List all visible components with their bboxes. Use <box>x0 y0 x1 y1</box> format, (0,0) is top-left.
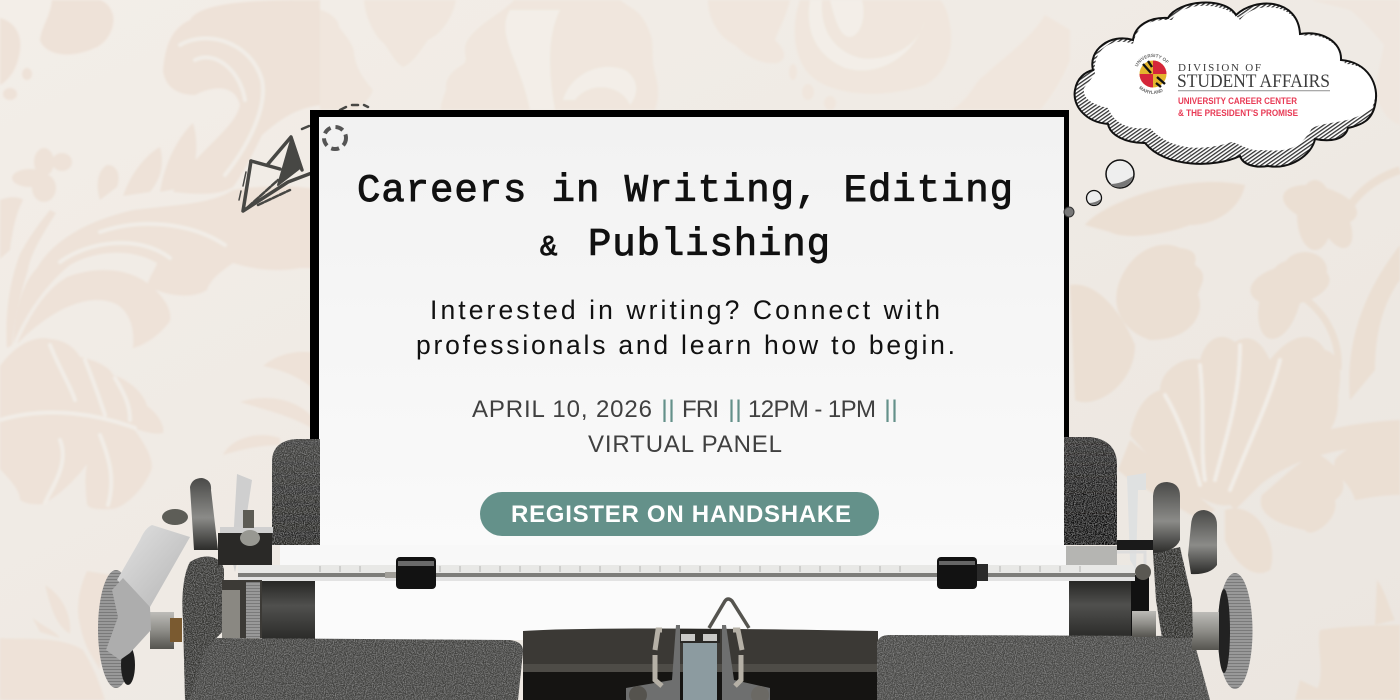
left paper-guard block <box>272 439 320 545</box>
register button <box>480 492 879 536</box>
slim lever <box>232 474 252 572</box>
event details: || <box>661 396 675 423</box>
paper below guard <box>280 545 1066 567</box>
career center wordmark: & THE PRESIDENT'S PROMISE <box>1178 108 1298 119</box>
left knob <box>98 570 135 688</box>
right keyboard cover <box>877 635 1210 700</box>
top centre foliage <box>320 0 1400 125</box>
title: Careers in Writing, Editing <box>357 169 1013 213</box>
event details: || <box>884 396 898 423</box>
title: Publishing <box>588 223 830 267</box>
division wordmark: DIVISION OF <box>1178 62 1261 74</box>
right slim tab <box>1127 473 1146 570</box>
right paper-guard block <box>1064 437 1117 545</box>
left dark disc <box>182 556 224 700</box>
paper below rod <box>315 576 1069 640</box>
right knob <box>1218 573 1252 689</box>
paper sheet with black frame <box>310 110 1069 557</box>
university seal: UNIVERSITY OF <box>1134 54 1169 66</box>
event details: FRI <box>682 396 719 423</box>
typewriter <box>98 437 1252 700</box>
right mechanism <box>1117 473 1252 689</box>
right collar <box>1132 611 1156 637</box>
mechanism centre <box>218 510 273 638</box>
description <box>416 295 955 360</box>
right slider <box>937 557 988 589</box>
left mechanism <box>98 474 273 700</box>
right foliage <box>1070 170 1400 700</box>
right outer lever <box>1188 510 1217 574</box>
dashed loop on paper <box>324 127 346 149</box>
right silver plate <box>1066 546 1117 566</box>
left platen <box>262 578 316 640</box>
left handle <box>106 578 151 660</box>
scale rod <box>238 565 1135 581</box>
event details: APRIL 10, 2026 <box>472 396 652 423</box>
description: Interested in writing? Connect with <box>430 295 940 325</box>
event details <box>472 396 898 458</box>
career center wordmark <box>1178 96 1298 119</box>
event details: VIRTUAL PANEL <box>588 431 782 458</box>
central ribbon <box>523 628 878 700</box>
event details: 12PM - 1PM <box>748 396 876 423</box>
title <box>357 169 1013 267</box>
description: professionals and learn how to begin. <box>416 330 955 360</box>
top centre cut-outs <box>505 0 925 110</box>
left top lever <box>190 478 218 550</box>
left arm <box>117 525 190 607</box>
left slider <box>385 557 436 589</box>
type guide <box>626 625 770 700</box>
small knob <box>162 509 188 525</box>
division wordmark: STUDENT AFFAIRS <box>1177 71 1330 92</box>
left keyboard cover <box>190 638 523 700</box>
right rod joint <box>1117 540 1153 580</box>
right top lever <box>1153 482 1180 553</box>
register button: REGISTER ON HANDSHAKE <box>511 501 851 528</box>
university seal <box>1134 54 1169 94</box>
type guide wire <box>709 599 749 628</box>
university seal: MARYLAND <box>1139 86 1163 94</box>
right platen <box>1069 578 1131 638</box>
right axle <box>1192 612 1219 650</box>
title: & <box>540 231 557 264</box>
right dark plate <box>1153 547 1193 638</box>
paper airplane doodle <box>239 105 368 211</box>
event details: || <box>728 396 742 423</box>
thought cloud logo <box>1074 2 1378 168</box>
thought bubble small <box>1064 207 1074 217</box>
career center wordmark: UNIVERSITY CAREER CENTER <box>1178 96 1297 107</box>
thought bubble large <box>1106 160 1134 188</box>
thought bubble medium <box>1086 190 1102 206</box>
frond cut-outs <box>0 38 1280 505</box>
left foliage <box>0 0 320 700</box>
division wordmark <box>1177 62 1330 92</box>
left axle <box>150 612 182 649</box>
